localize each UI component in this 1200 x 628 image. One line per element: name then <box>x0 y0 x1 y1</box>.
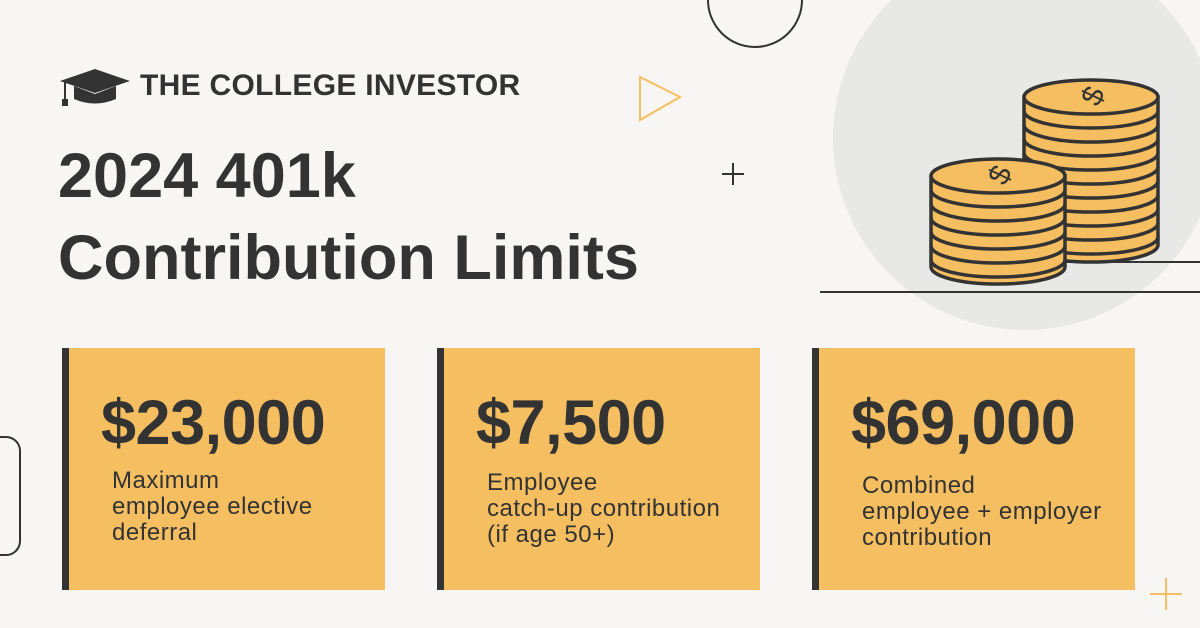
card 2: (if age 50+) <box>487 521 615 548</box>
illustration: coin stacks: $ <box>982 160 1019 190</box>
card 1: employee elective <box>112 493 313 520</box>
card 2: $7,500 <box>476 388 666 458</box>
logo: THE COLLEGE INVESTOR <box>140 69 520 102</box>
card 3: employee + employer <box>862 498 1102 525</box>
title: Contribution Limits <box>58 223 639 293</box>
card 3: $69,000 <box>851 388 1075 458</box>
title <box>58 141 639 293</box>
card 1: deferral <box>112 519 197 546</box>
card 1 <box>62 348 385 590</box>
card 1: $23,000 <box>101 388 325 458</box>
card 2 <box>437 348 760 590</box>
card 3: contribution <box>862 524 992 551</box>
title: 2024 401k <box>58 141 356 211</box>
card 2: Employee <box>487 469 598 496</box>
icon: graduation cap <box>60 69 130 106</box>
illustration: coin stacks: $ <box>1075 81 1112 111</box>
card 3: Combined <box>862 472 975 499</box>
card 3 <box>812 348 1135 590</box>
card 1: Maximum <box>112 467 220 494</box>
card 2: catch-up contribution <box>487 495 720 522</box>
